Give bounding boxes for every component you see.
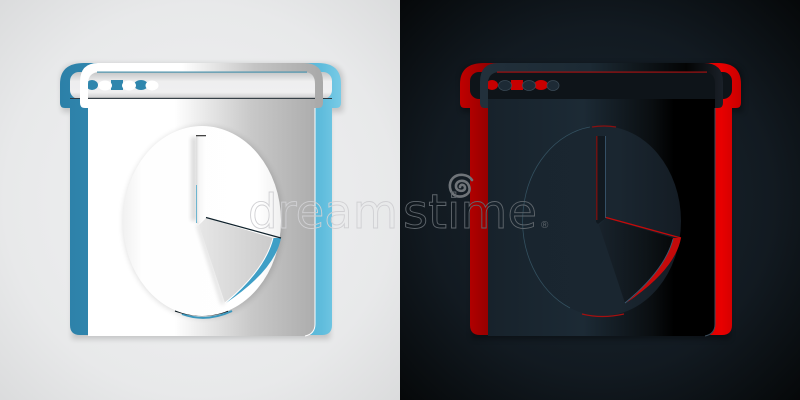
dark dots: [498, 80, 559, 90]
header inner strip: [470, 72, 732, 99]
slice left shadow: [198, 224, 223, 304]
window header frame: [480, 63, 723, 108]
cut-out slice backing in red: [626, 238, 681, 303]
icon: paper-cut browser window with pie chart, light version: [60, 63, 343, 339]
slice dark edge: [206, 218, 281, 238]
back window in blue: [60, 63, 341, 335]
page right edge: [705, 108, 715, 336]
header blue highlight: [97, 72, 307, 73]
page right edge: [305, 108, 315, 336]
header fold line: [70, 98, 332, 99]
watermark: dreamstime text on light side: dream: [248, 185, 398, 240]
panel: dark background: [400, 0, 800, 400]
drop shadow: [61, 64, 343, 339]
bottom dark rim: [175, 311, 228, 316]
watermark: swirl logo: [450, 175, 472, 197]
bottom blue rim: [182, 311, 232, 318]
slice blue edge: [625, 239, 673, 303]
slice red top edge: [606, 218, 681, 238]
page fold line: [88, 98, 315, 99]
slice white rim: [225, 238, 273, 303]
pie chart: [523, 126, 681, 316]
blue dots: [86, 80, 148, 90]
watermark: registered mark: ®: [541, 220, 549, 231]
header red highlight: [497, 72, 707, 73]
window control dots: [86, 80, 158, 90]
vertical cut shadow: [191, 137, 197, 221]
pie disc: [523, 126, 681, 316]
panel: light background: [0, 0, 400, 400]
top blue rim: [180, 128, 224, 131]
vertical cut top edge: [196, 135, 206, 136]
cut-out slice: [599, 218, 673, 303]
vertical cut: [596, 136, 606, 224]
ellipse shadow: [123, 126, 283, 318]
cut-out slice backing in blue: [226, 238, 281, 303]
header inner strip: [70, 72, 332, 99]
vertical cut blue edge: [196, 185, 197, 223]
vertical cut: [196, 135, 206, 224]
window header frame: [80, 63, 323, 108]
back window in red: [460, 63, 741, 335]
icon: paper-cut browser window with pie chart, dark version: [460, 63, 743, 339]
top red rim: [592, 126, 616, 127]
vertical cut red edge: [596, 136, 598, 220]
window page: [488, 99, 715, 336]
red dots: [486, 80, 548, 90]
vertical cut blue edge: [605, 136, 606, 218]
left blue outline: [523, 127, 590, 308]
drop shadow: [461, 64, 743, 339]
window page: [88, 99, 315, 336]
watermark: dreamstime text on dark side: stime: [403, 185, 537, 240]
bottom red rim: [582, 314, 624, 316]
cut-out slice: [199, 218, 273, 303]
window control dots: [486, 80, 559, 90]
pie chart: [123, 126, 283, 318]
white dots: [98, 80, 158, 90]
pie disc: [123, 126, 281, 316]
